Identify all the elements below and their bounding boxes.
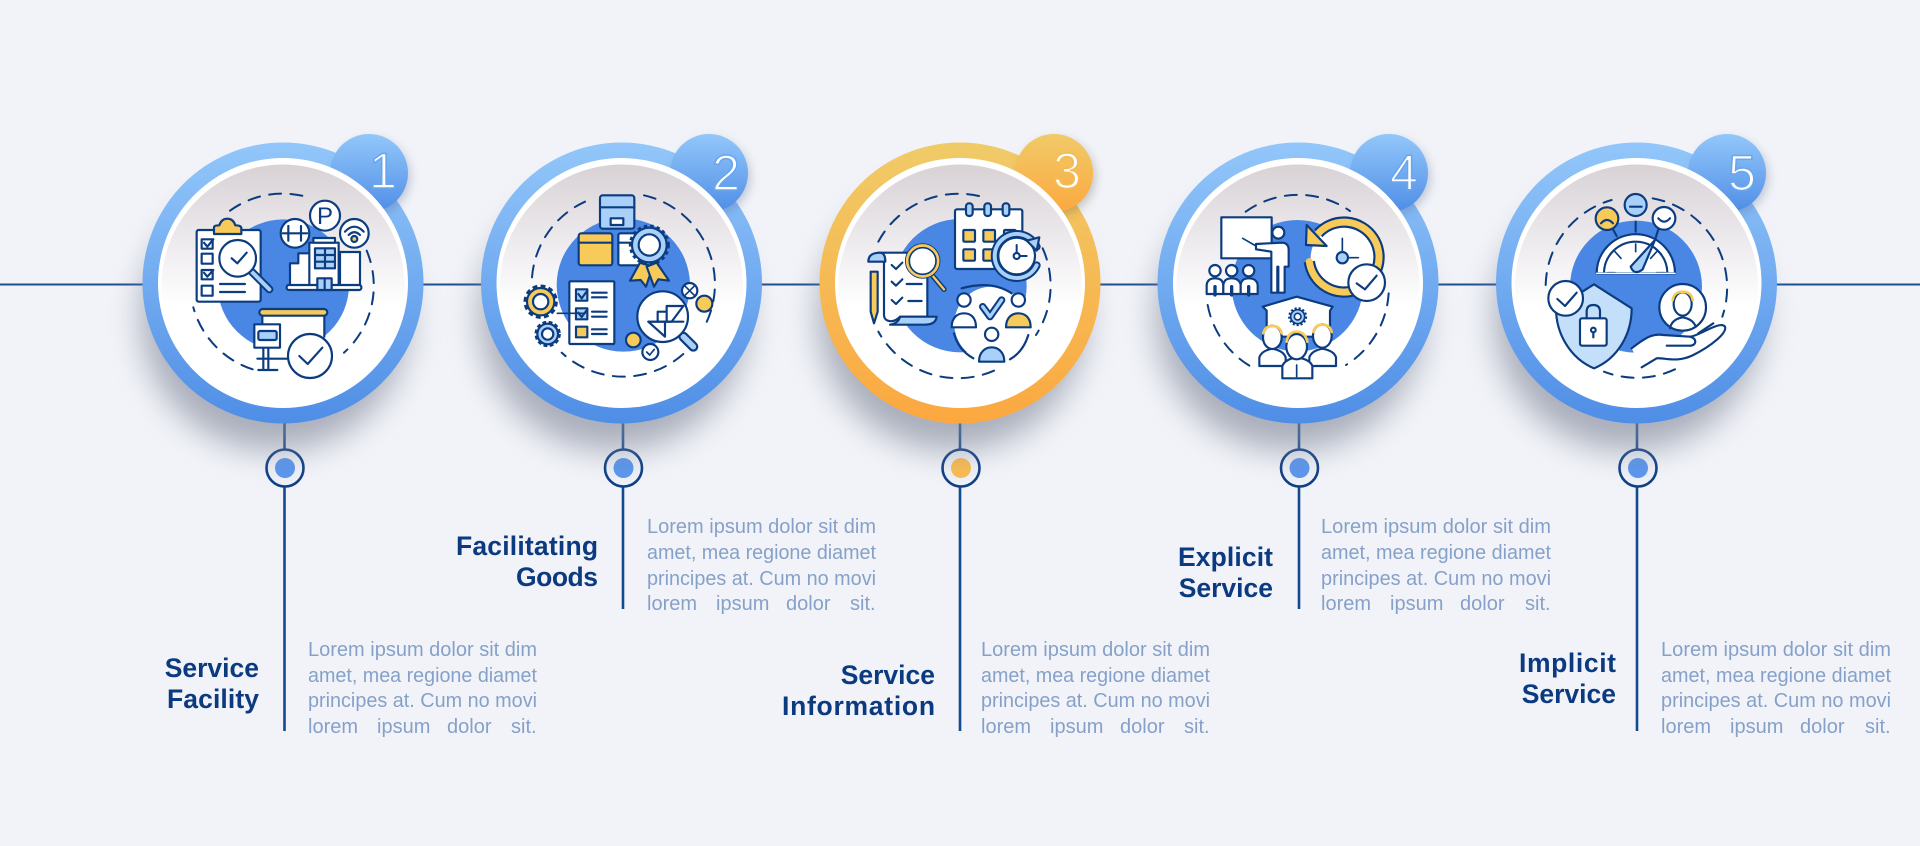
heading 3: Service — [841, 660, 935, 690]
horizontal timeline — [0, 284, 1920, 286]
body text 1: ipsum — [377, 716, 430, 738]
number 1: 1 — [369, 143, 397, 199]
body text 4: ipsum — [1390, 593, 1443, 615]
body text 2: Lorem ipsum dolor sit dim — [647, 516, 876, 538]
number 3: 3 — [1053, 143, 1081, 199]
circle ring 4 — [1156, 134, 1438, 451]
body text 4: lorem — [1321, 593, 1371, 615]
body text 3: lorem — [981, 716, 1031, 738]
heading 5 — [1519, 648, 1616, 709]
heading 1: Service — [165, 653, 259, 683]
connector and node 5 — [1620, 420, 1656, 731]
step 1: service facility — [141, 134, 537, 738]
icon: facility checklist, building and bus stop: P — [317, 203, 333, 230]
connector and node 2 — [605, 420, 642, 609]
heading 5: Implicit — [1519, 648, 1616, 678]
body text 1: sit. — [511, 716, 537, 738]
step 5: implicit service — [1494, 134, 1891, 738]
body text 1: principes at. Cum no movi — [308, 690, 537, 712]
body text 2: ipsum — [716, 593, 769, 615]
circle ring 3 — [818, 134, 1100, 451]
heading 4: Service — [1179, 573, 1273, 603]
body text 2: amet, mea regione diamet — [647, 542, 876, 564]
body text 5 — [1661, 639, 1891, 738]
connector and node 4 — [1281, 420, 1318, 609]
circle ring 1 — [141, 134, 424, 451]
body text 3: amet, mea regione diamet — [981, 665, 1210, 687]
body text 1: Lorem ipsum dolor sit dim — [308, 639, 537, 661]
heading 2 — [456, 531, 598, 592]
body text 3: Lorem ipsum dolor sit dim — [981, 639, 1210, 661]
circle ring 2 — [480, 134, 762, 451]
body text 2: principes at. Cum no movi — [647, 568, 876, 590]
body text 2: lorem — [647, 593, 697, 615]
number 2: 2 — [712, 145, 740, 201]
circle ring 5 — [1494, 134, 1777, 451]
number 5: 5 — [1728, 145, 1756, 201]
body text 3: ipsum — [1050, 716, 1103, 738]
body text 5: ipsum — [1730, 716, 1783, 738]
icon: gauge, shield and caring hand — [1546, 194, 1727, 378]
body text 4: amet, mea regione diamet — [1321, 542, 1551, 564]
body text 4: principes at. Cum no movi — [1321, 568, 1551, 590]
body text 3: sit. — [1184, 716, 1210, 738]
body text 4: Lorem ipsum dolor sit dim — [1321, 516, 1551, 538]
body text 5: amet, mea regione diamet — [1661, 665, 1891, 687]
step 4: explicit service — [1156, 134, 1551, 615]
heading 2: Goods — [516, 562, 598, 592]
heading 5: Service — [1522, 679, 1616, 709]
body text 5: dolor — [1800, 716, 1845, 738]
step 3: service information — [782, 134, 1210, 738]
icon: training, clock and staff team — [1207, 195, 1389, 378]
body text 5: lorem — [1661, 716, 1711, 738]
body text 1: lorem — [308, 716, 358, 738]
heading 1: Facility — [167, 684, 259, 714]
body text 3: dolor — [1120, 716, 1165, 738]
body text 2: sit. — [850, 593, 876, 615]
connector and node 3 — [942, 420, 980, 731]
icon: facility checklist, building and bus stop — [193, 194, 374, 378]
body text 1 — [308, 639, 537, 738]
body text 4: sit. — [1525, 593, 1551, 615]
body text 3 — [981, 639, 1210, 738]
body text 2 — [647, 516, 876, 615]
body text 4 — [1321, 516, 1551, 615]
heading 4: Explicit — [1178, 542, 1273, 572]
heading 1 — [165, 653, 259, 714]
connector and node 1 — [266, 420, 304, 731]
body text 5: sit. — [1865, 716, 1891, 738]
heading 3: Information — [782, 691, 935, 721]
icon: boxes, checklist, gears and inspection — [526, 195, 715, 377]
body text 4: dolor — [1460, 593, 1505, 615]
body text 1: amet, mea regione diamet — [308, 665, 537, 687]
heading 2: Facilitating — [456, 531, 598, 561]
heading 3 — [782, 660, 935, 721]
number 4: 4 — [1390, 145, 1418, 201]
body text 2: dolor — [786, 593, 831, 615]
icon: calendar, scroll checklist and people — [868, 194, 1051, 378]
heading 4 — [1178, 542, 1273, 603]
step 2: facilitating goods — [456, 134, 876, 615]
body text 3: principes at. Cum no movi — [981, 690, 1210, 712]
body text 5: Lorem ipsum dolor sit dim — [1661, 639, 1891, 661]
body text 5: principes at. Cum no movi — [1661, 690, 1891, 712]
body text 1: dolor — [447, 716, 492, 738]
